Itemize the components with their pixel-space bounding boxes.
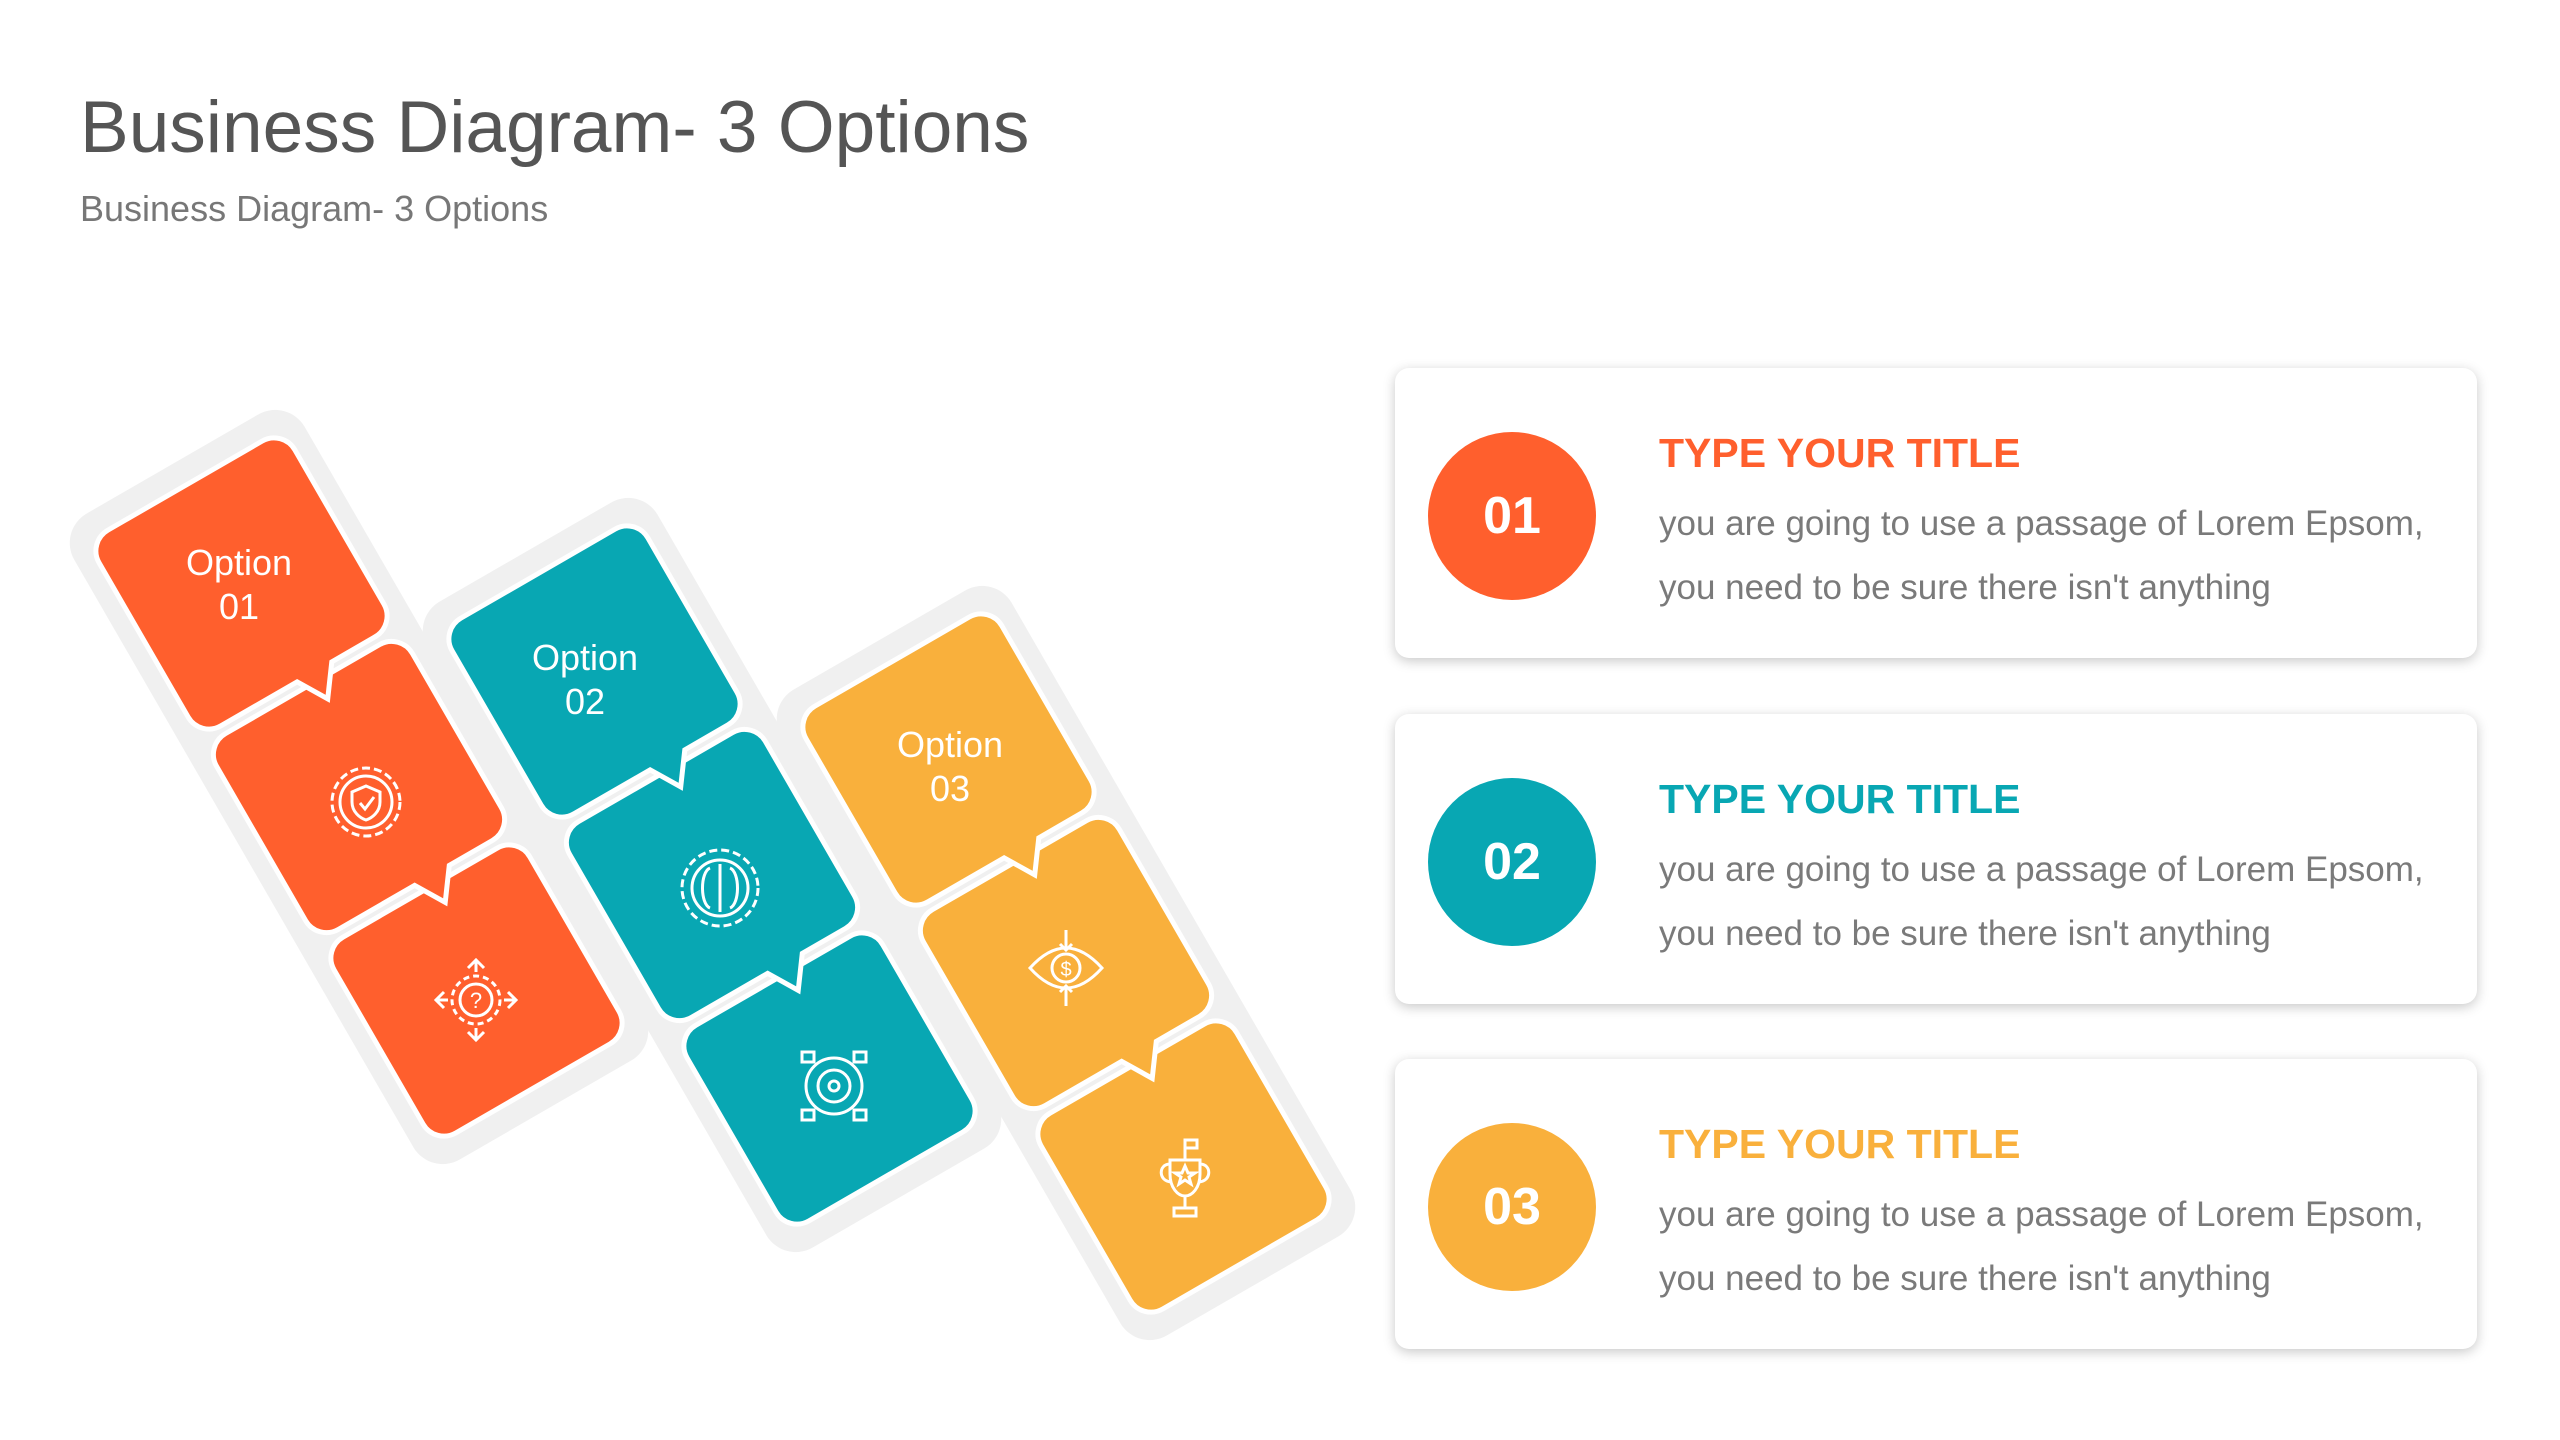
card text 01: you are going to use a passage of Lorem Epsom, (1659, 504, 2424, 543)
icon: question gear arrows (436, 960, 516, 1040)
title: Business Diagram- 3 Options (80, 87, 1029, 168)
card text 01: you need to be sure there isn't anything (1659, 568, 2271, 607)
icon: eye dollar: $ (1060, 959, 1072, 981)
column 3 (764, 573, 1368, 1353)
option labels (186, 542, 1003, 809)
card 01 (1395, 368, 2477, 658)
column 1 (57, 397, 661, 1177)
circle 03 (1428, 1123, 1596, 1291)
icon: question gear arrows: ? (470, 988, 482, 1013)
card text 03: you need to be sure there isn't anything (1659, 1259, 2271, 1298)
circle 01: 01 (1483, 487, 1541, 545)
option labels: Option (897, 724, 1003, 765)
card text 03 (1659, 1195, 2424, 1298)
icon: target team (802, 1052, 866, 1120)
option labels: 03 (930, 768, 970, 809)
circle 03: 03 (1483, 1178, 1541, 1236)
icon: brain gear (682, 850, 758, 926)
card text 02: you need to be sure there isn't anything (1659, 914, 2271, 953)
option labels: Option (532, 637, 638, 678)
icon: shield gear (332, 768, 400, 836)
option labels: 01 (219, 586, 259, 627)
option labels: Option (186, 542, 292, 583)
subtitle: Business Diagram- 3 Options (80, 188, 548, 229)
circle 02 (1428, 778, 1596, 946)
card 02 (1395, 714, 2477, 1004)
card 03 (1395, 1059, 2477, 1349)
card title 01: TYPE YOUR TITLE (1659, 430, 2020, 476)
card title 03: TYPE YOUR TITLE (1659, 1121, 2020, 1167)
option labels: 02 (565, 681, 605, 722)
circle 02: 02 (1483, 833, 1541, 891)
icon: eye dollar (1030, 930, 1102, 1006)
icon: trophy (1161, 1140, 1209, 1216)
diagram (70, 410, 1355, 1340)
card text 01 (1659, 504, 2424, 607)
column 2 (410, 485, 1014, 1265)
card text 02 (1659, 850, 2424, 953)
card text 03: you are going to use a passage of Lorem Epsom, (1659, 1195, 2424, 1234)
circle 01 (1428, 432, 1596, 600)
card text 02: you are going to use a passage of Lorem Epsom, (1659, 850, 2424, 889)
icons (332, 768, 1209, 1216)
card title 02: TYPE YOUR TITLE (1659, 776, 2020, 822)
